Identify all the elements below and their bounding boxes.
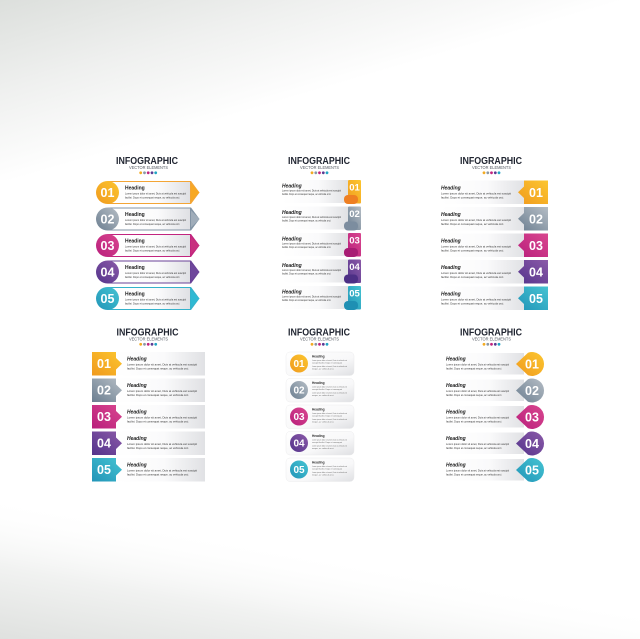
row 03: facilisi. Dopo et consequat neque, ac vehicula orci. <box>441 248 504 252</box>
row 05: neque, ac vehicula orci. <box>312 474 335 476</box>
row 02: Lorem ipsum dolor sit amet, Duis at vehicula est suscipit <box>127 389 197 393</box>
heading: panel six: INFOGRAPHIC <box>460 328 522 338</box>
row 05: 05 <box>525 464 539 478</box>
row 01: Lorem ipsum dolor sit amet, Duis at vehicula est suscipit <box>446 362 509 366</box>
row 02: 02 <box>525 384 539 398</box>
row 05: Heading <box>282 290 302 296</box>
row 05: 05 <box>529 292 543 306</box>
row 02: suscipit facilisi. Dopo et consequat <box>312 388 342 391</box>
panel: rounded cards <box>286 328 354 482</box>
row 04: Lorem ipsum dolor sit amet, Duis at vehicula est <box>312 444 347 448</box>
row 01: Lorem ipsum dolor sit amet, Duis at vehicula est <box>312 365 347 368</box>
row 05: Heading <box>125 292 145 298</box>
row 04: facilisi. Dopo et consequat neque, ac vehicula orci. <box>125 275 180 279</box>
row 02: Heading <box>441 212 461 218</box>
row 05: 05 <box>293 465 305 476</box>
row 04: Heading <box>125 265 145 271</box>
row 03 <box>96 234 200 257</box>
row 05: Lorem ipsum dolor sit amet, Duis at vehicula est <box>312 471 347 474</box>
row 02: Heading <box>127 383 147 389</box>
row 05: Lorem ipsum dolor sit amet, Duis at vehicula est suscipit <box>127 468 197 472</box>
row 02: facilisi. Dopo et consequat neque, ac vehicula orci. <box>127 393 189 397</box>
heading: panel two: INFOGRAPHIC <box>288 156 350 167</box>
row 01: 01 <box>293 359 305 370</box>
row 01: 01 <box>101 186 114 200</box>
row 05: Heading <box>446 462 466 468</box>
row 04 <box>441 260 548 284</box>
row 03: 03 <box>529 239 543 253</box>
row 05: Lorem ipsum dolor sit amet, Duis at vehicula est suscipit <box>441 298 511 302</box>
row 01 <box>92 352 205 376</box>
row 04: facilisi. Dopo et consequat neque, ac vehicula orci. <box>282 272 331 276</box>
heading: panel two: VECTOR ELEMENTS <box>300 165 339 170</box>
row 02: Lorem ipsum dolor sit amet, Duis at vehicula est <box>312 392 347 394</box>
row 01: Lorem ipsum dolor sit amet, Duis at vehicula est <box>312 359 347 362</box>
row 03: Heading <box>125 238 145 244</box>
row 03: Lorem ipsum dolor sit amet, Duis at vehicula est suscipit <box>446 416 509 420</box>
row 01 <box>446 352 544 376</box>
row 04: neque, ac vehicula orci. <box>312 447 335 450</box>
row 03: 03 <box>97 410 111 424</box>
row 05: Heading <box>312 460 325 464</box>
row 05: facilisi. Dopo et consequat neque, ac vehicula orci. <box>127 472 189 476</box>
row 03: Lorem ipsum dolor sit amet, Duis at vehicula est suscipit <box>127 416 197 420</box>
heading: panel four <box>116 328 178 346</box>
row 03: Heading <box>312 408 325 412</box>
row 01: 01 <box>349 182 360 194</box>
row 04: 04 <box>101 266 114 280</box>
row 01: facilisi. Dopo et consequat neque, ac vehicula orci. <box>127 366 189 370</box>
row 03 <box>286 405 354 428</box>
panel: folded tabs <box>282 156 361 310</box>
row 03: Lorem ipsum dolor sit amet, Duis at vehicula est suscipit <box>282 242 341 246</box>
row 01: Heading <box>441 186 461 192</box>
row 04 <box>92 432 205 455</box>
row 02: Heading <box>312 381 325 385</box>
row 02: Lorem ipsum dolor sit amet, Duis at vehicula est suscipit <box>125 218 186 222</box>
row 02: 02 <box>101 212 114 226</box>
row 04: 04 <box>525 437 539 451</box>
row 03: 03 <box>293 412 305 423</box>
heading: panel one: INFOGRAPHIC <box>116 156 178 167</box>
row 05 <box>282 286 361 310</box>
row 02 <box>441 207 548 230</box>
heading: panel one: VECTOR ELEMENTS <box>129 165 168 170</box>
row 04: facilisi. Dopo et consequat neque, ac vehicula orci. <box>446 446 502 450</box>
row 04: 04 <box>293 438 305 450</box>
row 04: suscipit facilisi. Dopo et consequat <box>312 441 342 444</box>
row 05: facilisi. Dopo et consequat neque, ac vehicula orci. <box>125 302 180 306</box>
row 02: facilisi. Dopo et consequat neque, ac vehicula orci. <box>125 222 180 226</box>
row 01: Heading <box>312 354 325 358</box>
row 01: facilisi. Dopo et consequat neque, ac vehicula orci. <box>441 196 504 200</box>
row 05 <box>92 458 205 482</box>
row 02: neque, ac vehicula orci. <box>312 394 335 397</box>
panel: teardrop markers <box>446 328 544 482</box>
row 02: Heading <box>446 383 466 389</box>
row 01: facilisi. Dopo et consequat neque, ac vehicula orci. <box>282 192 331 196</box>
row 03: 03 <box>101 239 114 253</box>
row 02 <box>282 206 361 230</box>
row 03 <box>92 405 205 428</box>
row 03: Lorem ipsum dolor sit amet, Duis at vehicula est suscipit <box>125 244 186 248</box>
heading: panel six <box>460 328 522 346</box>
row 04 <box>446 431 544 456</box>
row 02: facilisi. Dopo et consequat neque, ac vehicula orci. <box>282 218 331 222</box>
row 04 <box>282 260 361 284</box>
row 05: Heading <box>441 292 461 298</box>
row 04: Heading <box>441 265 461 271</box>
row 05: facilisi. Dopo et consequat neque, ac vehicula orci. <box>282 298 331 302</box>
panel: arrow frames <box>96 156 200 310</box>
heading: panel five: VECTOR ELEMENTS <box>300 336 339 342</box>
row 02: Lorem ipsum dolor sit amet, Duis at vehicula est <box>312 386 347 388</box>
row 03: Lorem ipsum dolor sit amet, Duis at vehicula est <box>312 412 347 415</box>
row 05: 05 <box>349 288 360 300</box>
row 04: Lorem ipsum dolor sit amet, Duis at vehicula est suscipit <box>125 271 186 275</box>
row 01: neque, ac vehicula orci. <box>312 368 335 370</box>
row 05: Lorem ipsum dolor sit amet, Duis at vehicula est suscipit <box>282 294 341 298</box>
heading: panel three: INFOGRAPHIC <box>460 156 522 167</box>
row 03: Heading <box>441 238 461 244</box>
row 01: Lorem ipsum dolor sit amet, Duis at vehicula est suscipit <box>441 192 511 196</box>
heading: panel five <box>288 328 350 346</box>
row 05: 05 <box>97 463 111 477</box>
row 04: facilisi. Dopo et consequat neque, ac vehicula orci. <box>127 446 189 450</box>
row 04: Heading <box>446 436 466 442</box>
row 03: facilisi. Dopo et consequat neque, ac vehicula orci. <box>127 420 189 424</box>
row 01: 01 <box>529 186 543 200</box>
row 01 <box>282 180 361 204</box>
row 05: Lorem ipsum dolor sit amet, Duis at vehicula est <box>312 465 347 468</box>
row 01: Heading <box>127 356 147 362</box>
heading: panel two <box>288 156 350 174</box>
heading: panel three <box>460 156 522 174</box>
heading: panel four: INFOGRAPHIC <box>116 328 178 338</box>
row 03: suscipit facilisi. Dopo et consequat <box>312 414 342 418</box>
row 01: Heading <box>446 356 466 362</box>
row 01: Heading <box>125 186 145 192</box>
row 03: Lorem ipsum dolor sit amet, Duis at vehicula est suscipit <box>441 244 511 248</box>
heading: panel five: INFOGRAPHIC <box>288 328 350 338</box>
row 03: facilisi. Dopo et consequat neque, ac vehicula orci. <box>446 420 502 424</box>
row 02: 02 <box>349 209 360 220</box>
row 03 <box>446 405 544 429</box>
row 01 <box>441 180 548 204</box>
row 05: facilisi. Dopo et consequat neque, ac vehicula orci. <box>441 302 504 306</box>
row 01: 01 <box>525 358 539 372</box>
row 03: Lorem ipsum dolor sit amet, Duis at vehicula est <box>312 418 347 421</box>
row 03: Heading <box>446 410 466 416</box>
row 05 <box>446 458 544 482</box>
row 05: facilisi. Dopo et consequat neque, ac vehicula orci. <box>446 472 502 476</box>
row 04: 04 <box>529 266 543 280</box>
row 02 <box>446 378 544 402</box>
row 02: 02 <box>97 384 111 398</box>
row 01: Lorem ipsum dolor sit amet, Duis at vehicula est suscipit <box>282 188 341 192</box>
row 02: 02 <box>293 386 305 396</box>
row 02 <box>92 378 205 402</box>
row 04: 04 <box>97 436 111 450</box>
row 02: Lorem ipsum dolor sit amet, Duis at vehicula est suscipit <box>446 389 509 393</box>
row 05: Heading <box>127 462 147 468</box>
row 01 <box>96 181 200 204</box>
row 01: 01 <box>97 357 111 371</box>
row 04: Lorem ipsum dolor sit amet, Duis at vehicula est <box>312 438 347 442</box>
row 02: Lorem ipsum dolor sit amet, Duis at vehicula est suscipit <box>282 215 341 219</box>
row 02: facilisi. Dopo et consequat neque, ac vehicula orci. <box>446 393 502 397</box>
heading: panel one <box>116 156 178 174</box>
panel: right-pointing tabs <box>92 328 205 482</box>
row 03: Heading <box>127 410 147 416</box>
row 04: Lorem ipsum dolor sit amet, Duis at vehicula est suscipit <box>441 271 511 275</box>
row 02 <box>96 208 200 230</box>
row 04: Heading <box>282 263 302 269</box>
row 05: Lorem ipsum dolor sit amet, Duis at vehicula est suscipit <box>125 298 186 302</box>
row 05: 05 <box>101 292 114 306</box>
heading: panel four: VECTOR ELEMENTS <box>129 336 168 342</box>
row 01: facilisi. Dopo et consequat neque, ac vehicula orci. <box>446 366 502 370</box>
row 01: facilisi. Dopo et consequat neque, ac vehicula orci. <box>125 196 180 200</box>
row 05 <box>96 287 200 310</box>
row 01: Lorem ipsum dolor sit amet, Duis at vehicula est suscipit <box>127 362 197 366</box>
row 02 <box>286 378 354 402</box>
row 02: facilisi. Dopo et consequat neque, ac vehicula orci. <box>441 222 504 226</box>
row 03 <box>282 233 361 257</box>
row 04: facilisi. Dopo et consequat neque, ac vehicula orci. <box>441 275 504 279</box>
heading: panel six: VECTOR ELEMENTS <box>472 336 511 342</box>
row 04: Lorem ipsum dolor sit amet, Duis at vehicula est suscipit <box>282 268 341 272</box>
row 05 <box>286 458 354 482</box>
row 02: Lorem ipsum dolor sit amet, Duis at vehicula est suscipit <box>441 218 511 222</box>
row 04 <box>286 432 354 455</box>
row 03: neque, ac vehicula orci. <box>312 420 335 424</box>
row 04: Heading <box>312 434 325 438</box>
row 01: suscipit facilisi. Dopo et consequat <box>312 362 342 364</box>
row 03: 03 <box>349 236 360 246</box>
row 03: Heading <box>282 236 302 242</box>
row 01 <box>286 352 354 376</box>
row 02: Heading <box>282 210 302 216</box>
row 01: Lorem ipsum dolor sit amet, Duis at vehicula est suscipit <box>125 192 186 196</box>
panel: left-pointing tabs <box>441 156 548 310</box>
row 04: Heading <box>127 436 147 442</box>
row 01: Heading <box>282 184 302 190</box>
row 05 <box>441 286 548 310</box>
row 03 <box>441 234 548 257</box>
row 05: Lorem ipsum dolor sit amet, Duis at vehicula est suscipit <box>446 468 509 472</box>
heading: panel three: VECTOR ELEMENTS <box>472 165 511 170</box>
row 02: 02 <box>529 212 543 226</box>
row 04: 04 <box>349 262 360 273</box>
row 03: facilisi. Dopo et consequat neque, ac vehicula orci. <box>125 248 180 252</box>
row 04 <box>96 260 200 284</box>
row 02: Heading <box>125 212 145 218</box>
row 05: suscipit facilisi. Dopo et consequat <box>312 468 342 470</box>
row 04: Lorem ipsum dolor sit amet, Duis at vehicula est suscipit <box>127 442 197 446</box>
row 03: 03 <box>525 410 539 424</box>
row 04: Lorem ipsum dolor sit amet, Duis at vehicula est suscipit <box>446 442 509 446</box>
row 03: facilisi. Dopo et consequat neque, ac vehicula orci. <box>282 245 331 249</box>
